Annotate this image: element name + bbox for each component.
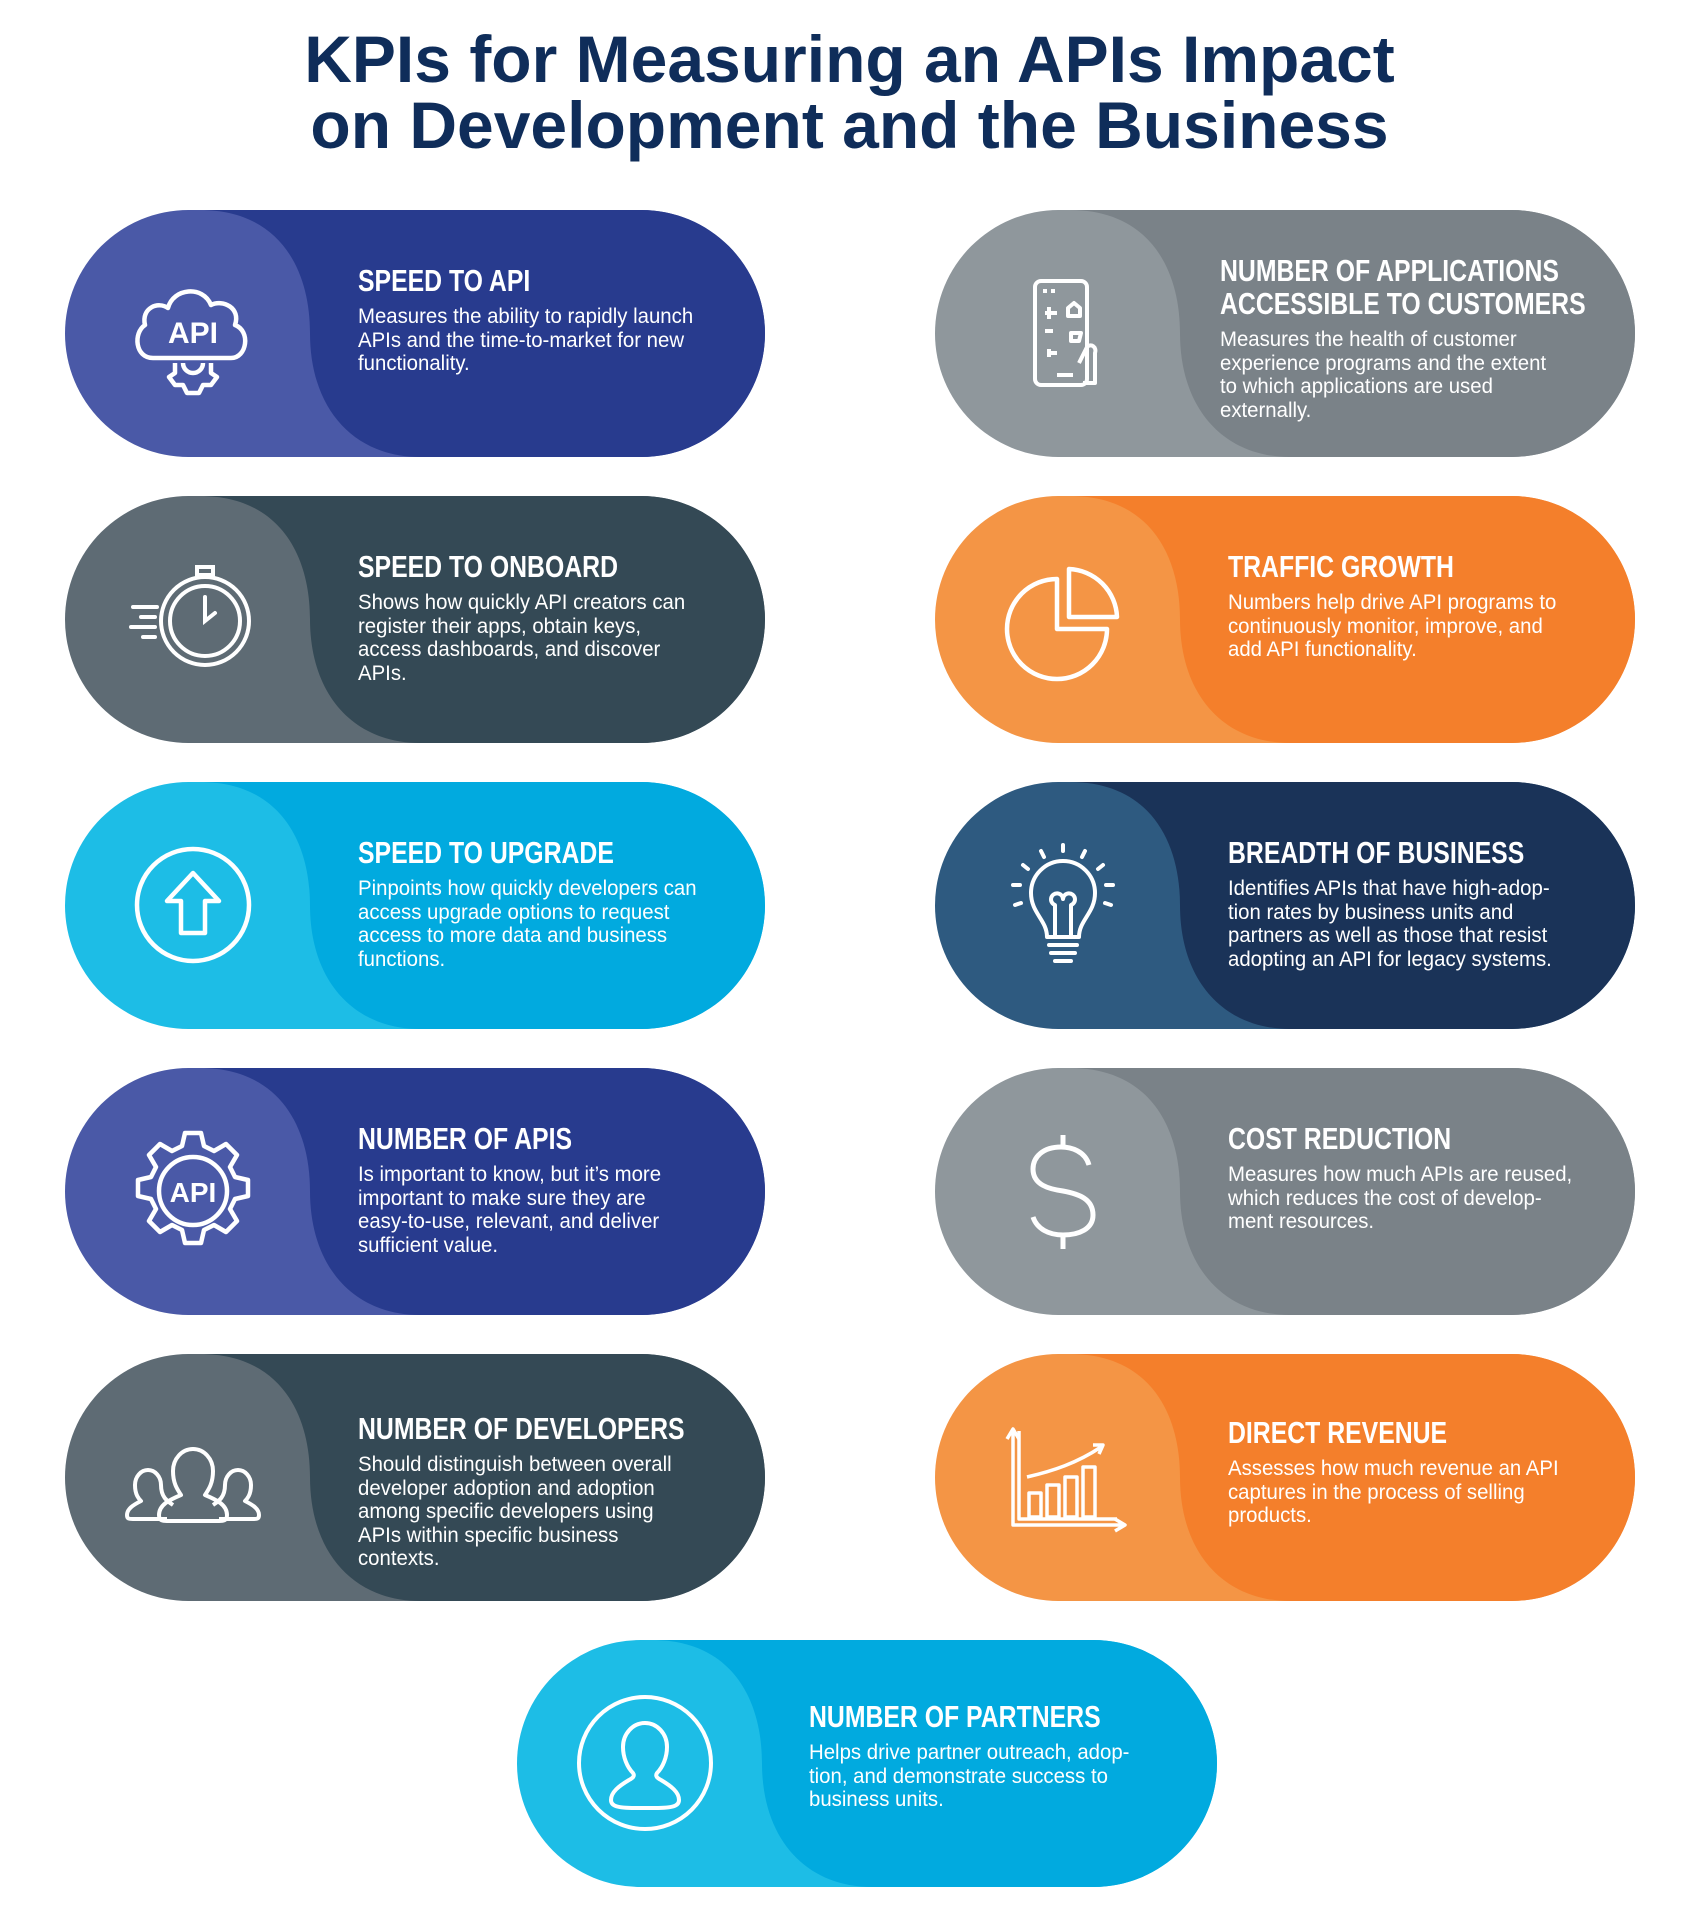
- text: speed to upgrade: SPEED TO UPGRADE: [358, 835, 614, 870]
- title: [304, 22, 1395, 162]
- text: direct revenue: [1228, 1415, 1559, 1527]
- text: number of apis: sufficient value.: [358, 1234, 498, 1256]
- text: number of developers: NUMBER OF DEVELOPERS: [358, 1411, 685, 1446]
- text: cost reduction: [1228, 1121, 1572, 1233]
- text: speed to upgrade: access upgrade options to request: [358, 900, 669, 924]
- text: number of apis: [358, 1121, 661, 1256]
- icon: developers group: [125, 1447, 261, 1523]
- icon: upgrade arrow: [134, 846, 252, 964]
- text: speed to onboard: register their apps, obtain keys,: [358, 614, 641, 638]
- text: speed to upgrade: [358, 835, 697, 970]
- text: speed to onboard: APIs.: [358, 662, 407, 684]
- text: cost reduction: COST REDUCTION: [1228, 1121, 1451, 1156]
- text: breadth of business: tion rates by business units and: [1228, 900, 1513, 924]
- text: breadth of business: Identifies APIs that have high-adop-: [1228, 877, 1550, 900]
- text: cost reduction: which reduces the cost of develop-: [1228, 1186, 1542, 1210]
- text: breadth of business: partners as well as those that resist: [1228, 924, 1547, 947]
- text: number of applications: to which applications are used: [1220, 375, 1493, 398]
- icon: partner person: [577, 1695, 713, 1831]
- icon: api gear: API: [170, 1177, 216, 1208]
- text: speed to upgrade: access to more data and business: [358, 924, 667, 947]
- text: speed to onboard: [358, 549, 685, 684]
- text: direct revenue: captures in the process of selling: [1228, 1480, 1525, 1504]
- text: number of partners: tion, and demonstrate success to: [809, 1764, 1108, 1788]
- text: number of applications: ACCESSIBLE TO CUSTOMERS: [1220, 286, 1586, 321]
- text: traffic growth: add API functionality.: [1228, 638, 1417, 661]
- text: number of applications: NUMBER OF APPLICATIONS: [1220, 253, 1559, 288]
- text: number of developers: among specific developers using: [358, 1500, 654, 1523]
- icon: pie chart: [1004, 566, 1120, 682]
- text: number of developers: developer adoption and adoption: [358, 1476, 655, 1500]
- text: number of apis: NUMBER OF APIS: [358, 1121, 572, 1156]
- text: cost reduction: ment resources.: [1228, 1210, 1374, 1233]
- text: number of partners: [809, 1699, 1129, 1811]
- icon: phone apps: [1033, 279, 1098, 387]
- icon: api cloud gear: API: [168, 317, 218, 350]
- text: number of partners: business units.: [809, 1788, 944, 1811]
- text: number of developers: contexts.: [358, 1547, 440, 1570]
- text: traffic growth: continuously monitor, improve, and: [1228, 614, 1543, 638]
- text: speed to api: Measures the ability to rapidly launch: [358, 305, 693, 328]
- text: speed to api: [358, 263, 693, 375]
- panel: traffic growth: [935, 496, 1635, 743]
- text: number of applications: experience programs and the extent: [1220, 352, 1546, 374]
- icon: api gear: [136, 1130, 250, 1246]
- panel: number of applications: [935, 210, 1635, 457]
- text: number of apis: easy-to-use, relevant, and deliver: [358, 1210, 659, 1233]
- panel: number of partners: [517, 1640, 1217, 1887]
- text: number of developers: APIs within specific business: [358, 1524, 618, 1546]
- text: speed to onboard: Shows how quickly API creators can: [358, 591, 685, 614]
- icon: light bulb: [1011, 843, 1115, 963]
- text: speed to upgrade: functions.: [358, 948, 445, 970]
- text: traffic growth: TRAFFIC GROWTH: [1228, 549, 1454, 584]
- text: number of partners: NUMBER OF PARTNERS: [809, 1699, 1101, 1734]
- text: number of applications: [1220, 253, 1586, 422]
- text: number of developers: Should distinguish between overall: [358, 1453, 672, 1476]
- text: speed to onboard: SPEED TO ONBOARD: [358, 549, 618, 584]
- text: number of developers: [358, 1411, 685, 1570]
- icon: api cloud gear: [135, 289, 248, 396]
- text: breadth of business: BREADTH OF BUSINESS: [1228, 835, 1524, 870]
- text: speed to api: APIs and the time-to-market for new: [358, 328, 684, 352]
- text: cost reduction: Measures how much APIs are reused,: [1228, 1163, 1572, 1186]
- text: breadth of business: [1228, 835, 1552, 970]
- text: speed to api: functionality.: [358, 352, 470, 375]
- text: breadth of business: adopting an API for legacy systems.: [1228, 948, 1552, 970]
- text: speed to onboard: access dashboards, and discover: [358, 638, 660, 661]
- panel: speed to api: [65, 210, 765, 457]
- panel: speed to onboard: [65, 496, 765, 743]
- text: direct revenue: products.: [1228, 1504, 1312, 1527]
- text: direct revenue: Assesses how much revenue an API: [1228, 1457, 1559, 1480]
- panel: speed to upgrade: [65, 782, 765, 1029]
- text: speed to upgrade: Pinpoints how quickly developers can: [358, 877, 697, 900]
- text: direct revenue: DIRECT REVENUE: [1228, 1415, 1447, 1450]
- text: number of partners: Helps drive partner outreach, adop-: [809, 1741, 1129, 1764]
- panel: direct revenue: [935, 1354, 1635, 1601]
- text: number of apis: important to make sure they are: [358, 1186, 646, 1210]
- text: traffic growth: Numbers help drive API programs to: [1228, 591, 1556, 614]
- text: speed to api: SPEED TO API: [358, 263, 530, 298]
- text: number of apis: Is important to know, but it’s more: [358, 1163, 661, 1186]
- title: on Development and the Business: [310, 88, 1389, 162]
- panel: number of apis: [65, 1068, 765, 1315]
- text: number of applications: externally.: [1220, 398, 1311, 422]
- text: traffic growth: [1228, 549, 1556, 661]
- title: KPIs for Measuring an APIs Impact: [304, 22, 1395, 96]
- panel: breadth of business: [935, 782, 1635, 1029]
- icon: dollar: [1030, 1135, 1096, 1249]
- panel: cost reduction: [935, 1068, 1635, 1315]
- panel: number of developers: [65, 1354, 765, 1601]
- text: number of applications: Measures the health of customer: [1220, 328, 1517, 351]
- icon: bar chart growth: [1006, 1427, 1127, 1532]
- icon: stopwatch: [129, 565, 251, 667]
